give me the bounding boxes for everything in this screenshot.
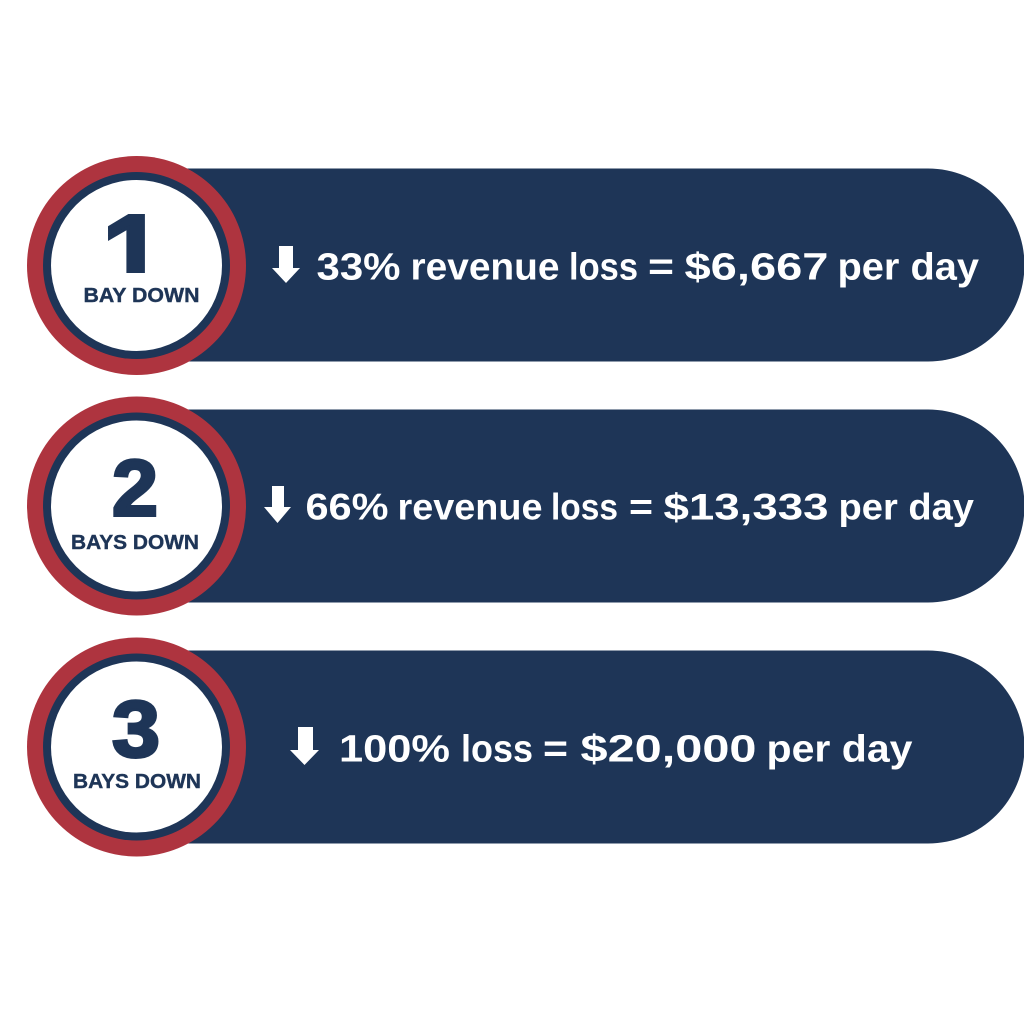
icon: down arrow — [264, 486, 291, 523]
text: 100% loss: = — [543, 728, 568, 770]
label: bay down: BAY DOWN — [84, 284, 200, 307]
text: revenue loss 66% — [306, 486, 974, 528]
icon: down arrow — [272, 246, 300, 283]
row 1: one bay down — [27, 156, 1024, 375]
numeral 1: 1 — [102, 194, 164, 310]
row 2: two bays down — [27, 396, 1024, 616]
text: 100% loss: $20,000 — [580, 728, 756, 770]
text: 100% loss: 100% — [339, 728, 450, 770]
text: revenue loss 33%: revenue — [410, 246, 560, 288]
row 3: three bays down — [27, 638, 1024, 856]
panel: row 1 bar — [137, 168, 1024, 362]
text: revenue loss 66%: 66% — [306, 486, 388, 528]
badge: 1 bay down — [27, 156, 246, 375]
text: revenue loss 66%: revenue — [398, 486, 542, 528]
text: 100% loss: per day — [766, 728, 912, 770]
panel: row 2 bar — [137, 410, 1024, 602]
text: revenue loss 33%: 33% — [316, 246, 400, 288]
text: revenue loss 33%: $6,667 — [684, 246, 828, 288]
text: revenue loss 66%: loss — [551, 486, 618, 528]
text: revenue loss 66%: = — [629, 486, 653, 528]
badge: 2 bays down — [27, 396, 246, 616]
text: 100% loss — [339, 728, 912, 770]
text: revenue loss 33%: per day — [838, 246, 979, 288]
badge: 3 bays down — [27, 638, 246, 856]
label: bays down: BAYS DOWN — [73, 771, 201, 793]
icon: down arrow — [290, 727, 319, 765]
text: revenue loss 66%: per day — [838, 486, 974, 528]
label: bays down: BAYS DOWN — [71, 532, 199, 554]
panel: row 3 bar — [137, 650, 1024, 844]
infographic — [27, 156, 1024, 856]
text: revenue loss 33% — [316, 246, 979, 288]
text: revenue loss 33%: = — [648, 246, 674, 288]
text: 100% loss: loss — [461, 728, 533, 770]
text: revenue loss 66%: $13,333 — [664, 486, 828, 528]
numeral 2: 2 — [112, 444, 158, 532]
text: revenue loss 33%: loss — [569, 246, 638, 288]
numeral 3: 3 — [112, 684, 160, 774]
